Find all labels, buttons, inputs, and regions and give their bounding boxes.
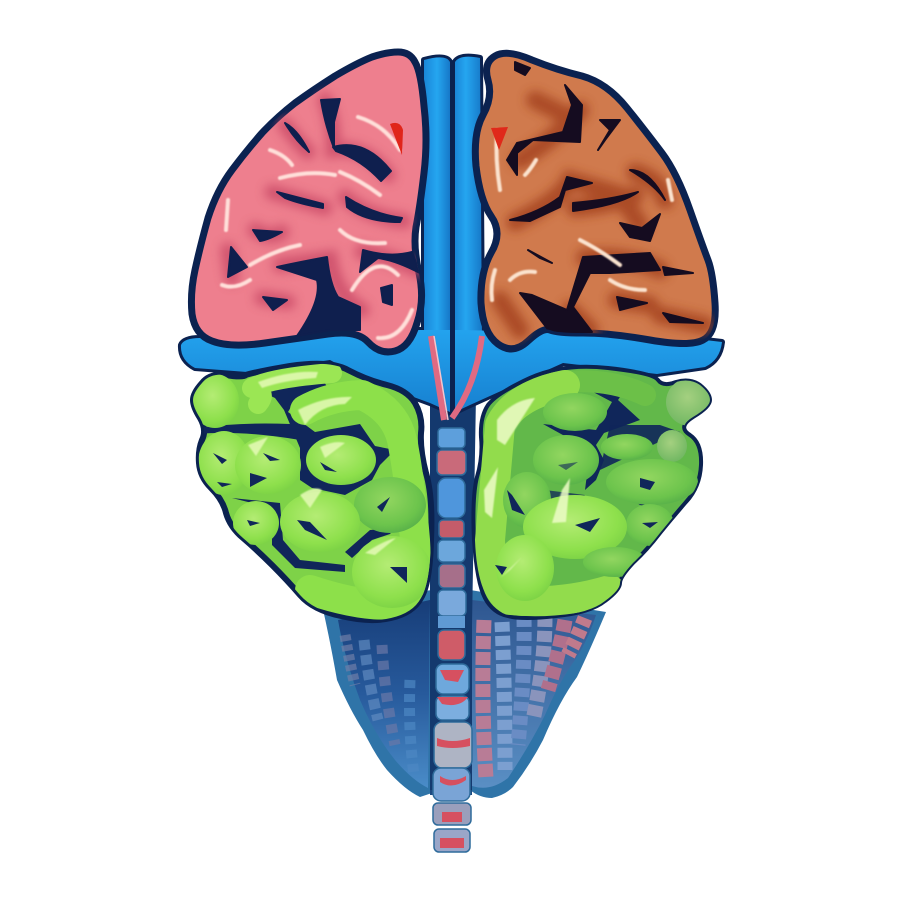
- right dark gaps: [543, 392, 680, 506]
- right gyri: [490, 381, 645, 601]
- green left highlights: [248, 372, 396, 555]
- green left sulci: [213, 453, 407, 583]
- cerebellum folds: right: [483, 616, 585, 778]
- pink soft shading: [228, 100, 418, 310]
- green right lobe: [473, 367, 714, 618]
- blue divider: left: [181, 57, 450, 412]
- blue divider: right: [455, 57, 722, 412]
- pink dark sulci: [228, 99, 420, 336]
- cord segments: [433, 428, 472, 852]
- left dark gaps: [198, 380, 395, 572]
- orange highlights: [491, 130, 672, 300]
- spinal cord: [431, 336, 482, 852]
- orange dark sulci: [507, 62, 703, 332]
- orange soft shading: [500, 100, 705, 330]
- cerebellum folds: left: [345, 635, 414, 775]
- green left lobe: [191, 364, 432, 620]
- green right sulci: [495, 462, 658, 575]
- cerebellum: [322, 590, 606, 798]
- dark central recess: [430, 395, 476, 790]
- right lobules: [496, 378, 714, 601]
- nerve tubes: [431, 336, 482, 420]
- brain illustration: [178, 48, 725, 853]
- cord red bands: [437, 616, 470, 848]
- orange lobe: [475, 53, 715, 349]
- pink lobe: [191, 52, 426, 352]
- pink highlights: [222, 117, 412, 338]
- left lobules: [191, 374, 432, 608]
- green right highlights: [484, 398, 570, 578]
- left gyri: [252, 373, 416, 605]
